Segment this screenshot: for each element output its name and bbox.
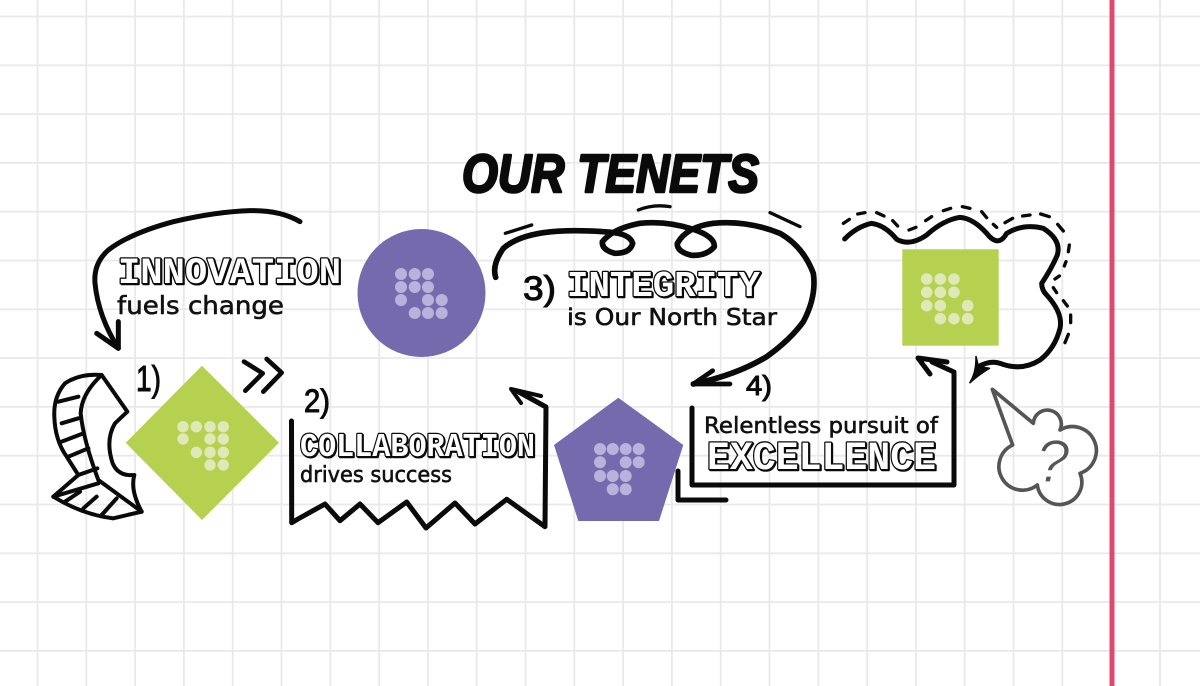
heading: integrity: INTEGRITY: [567, 266, 760, 307]
text: fuels change: fuels change: [117, 291, 284, 320]
icon: green square: [902, 249, 999, 346]
text: question mark: ?: [1036, 428, 1070, 495]
number: 2: 2): [304, 383, 330, 419]
icon: hand-drawn bent arrow: [53, 375, 142, 518]
number: 4: 4): [746, 370, 772, 401]
text: is our north star: is Our North Star: [567, 305, 778, 331]
number: 1: 1): [136, 358, 161, 399]
arrow: curved from circle to step 1: [95, 211, 300, 348]
icon: purple circle: [358, 229, 486, 357]
frame: collaboration zigzag arrow: [292, 389, 546, 528]
icon: double chevron: [244, 359, 282, 392]
number: 3: 3): [523, 270, 556, 308]
icon: green diamond: [126, 366, 279, 520]
icon: thought puff with question mark: [992, 389, 1096, 504]
arrow: wavy line around square: [843, 207, 1071, 383]
margin line: [1110, 0, 1114, 686]
text: relentless pursuit of: Relentless pursuit of: [704, 413, 939, 439]
heading: innovation: INNOVATION: [118, 253, 341, 295]
icon: purple pentagon: [554, 398, 683, 521]
frame: excellence box arrow: [678, 358, 954, 500]
heading: excellence: EXCELLENCE: [707, 437, 936, 482]
heading: collaboration: COLLABORATION: [300, 429, 535, 466]
arrow: looping curve from circle to step 4: [495, 206, 814, 384]
text: drives success: drives success: [300, 463, 452, 488]
title: OUR TENETS: [462, 144, 759, 204]
